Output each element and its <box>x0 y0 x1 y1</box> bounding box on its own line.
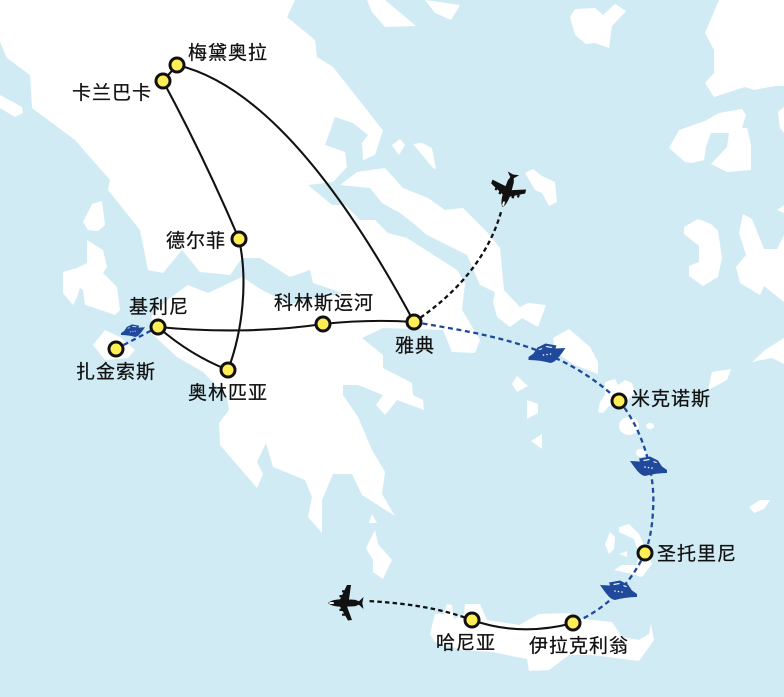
place name labels <box>72 42 737 657</box>
place name labels: 伊拉克利翁 <box>529 635 629 657</box>
mainland Greece and Peloponnese <box>0 0 480 533</box>
place name labels: 卡兰巴卡 <box>72 82 152 104</box>
icon: ship Santorini to Heraklion <box>600 580 637 600</box>
place name labels: 基利尼 <box>129 296 189 318</box>
place name labels: 雅典 <box>395 335 435 357</box>
icon: ship Ionian <box>121 324 145 337</box>
Ionian and northern islands <box>0 95 23 117</box>
solid land route lines <box>158 65 573 629</box>
icon: ship Mykonos to Santorini <box>630 456 667 476</box>
Euboea <box>340 168 546 327</box>
icon: ship Athens to Mykonos <box>528 344 566 363</box>
place name labels: 奥林匹亚 <box>188 382 268 404</box>
Santorini <box>614 524 652 577</box>
blue dashed ferry routes <box>116 322 653 623</box>
place name labels: 米克诺斯 <box>631 388 711 410</box>
place name labels: 科林斯运河 <box>274 292 374 314</box>
icon: plane departing from Chania <box>328 585 364 620</box>
place name labels: 哈尼亚 <box>436 632 496 654</box>
Crete <box>430 604 654 671</box>
black dashed flight routes <box>367 212 501 620</box>
place name labels: 扎金索斯 <box>76 361 156 383</box>
icon: plane departing from Athens <box>485 168 530 213</box>
place name labels: 德尔菲 <box>166 230 226 252</box>
Cyclades <box>369 514 377 523</box>
stop markers <box>109 58 652 630</box>
place name labels: 梅黛奥拉 <box>188 42 268 64</box>
place name labels: 圣托里尼 <box>657 543 737 565</box>
